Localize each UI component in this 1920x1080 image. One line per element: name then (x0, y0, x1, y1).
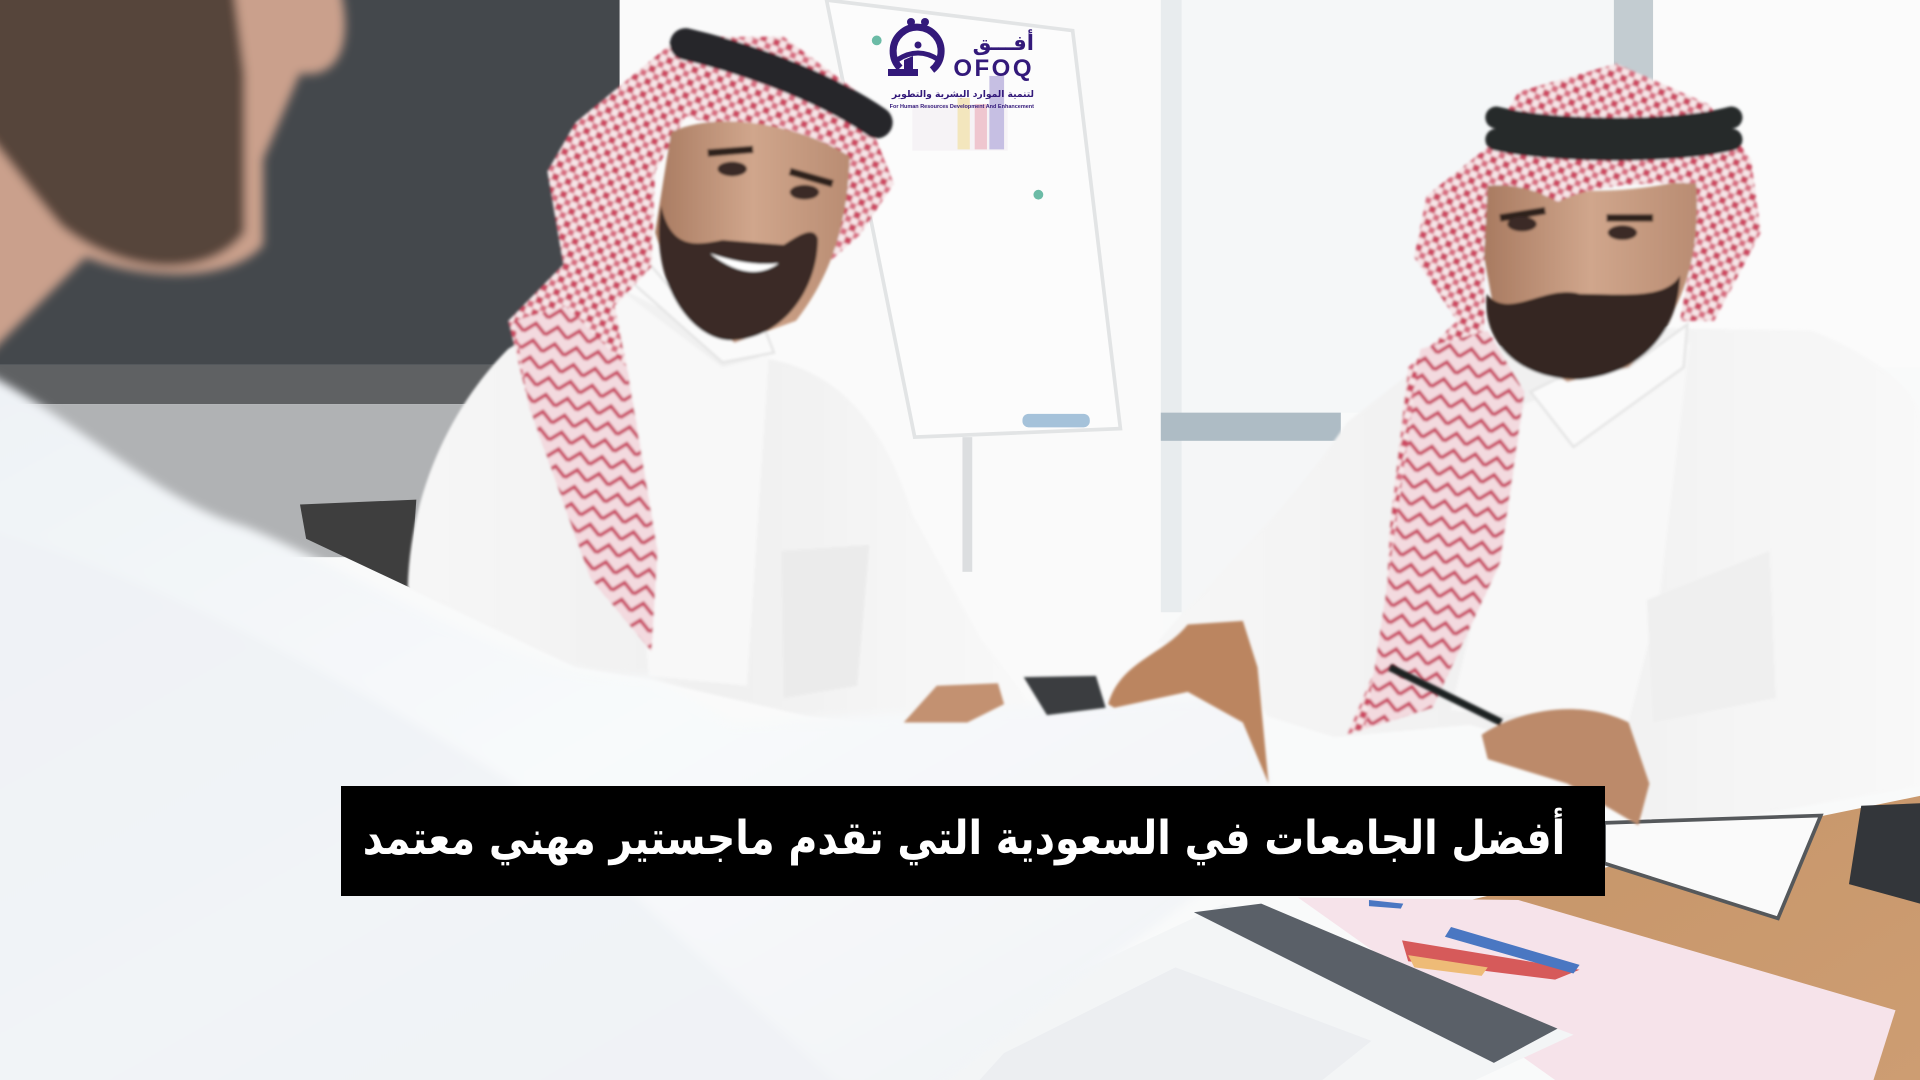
man on the right (1157, 64, 1920, 833)
logo english tagline: For Human Resources Development And Enhancement (890, 104, 1034, 110)
logo: OFOQ (888, 18, 1034, 110)
middle man headscarf (508, 37, 894, 651)
foreground person white sleeve (0, 367, 1269, 1080)
right man head band (1496, 118, 1731, 150)
right man hand and pen (1390, 667, 1649, 825)
right man face (1484, 178, 1697, 382)
right man beard (1486, 276, 1680, 380)
right man headscarf (1347, 64, 1761, 735)
right man robe (1157, 328, 1920, 833)
logo icon (888, 18, 941, 76)
whiteboard (827, 0, 1120, 572)
middle man beard (659, 206, 818, 340)
foreground person head (0, 0, 345, 367)
title bar (341, 786, 1605, 896)
middle man face (655, 121, 850, 343)
right man neck and collar (1531, 324, 1687, 447)
middle man robe (408, 284, 1041, 729)
table with papers (912, 796, 1920, 1080)
logo arabic name: أفـــق (973, 28, 1034, 55)
title: أفضل الجامعات في السعودية التي تقدم ماجستير مهني معتمد (363, 812, 1565, 866)
handshake (904, 621, 1269, 784)
middle man head band (686, 44, 877, 122)
logo arabic tagline: لتنمية الموارد البشرية والتطوير (891, 89, 1034, 100)
man in the middle (408, 37, 1041, 729)
wall monitor (0, 0, 620, 588)
logo latin name: OFOQ (953, 55, 1034, 82)
right man forehead scarf (1484, 149, 1702, 202)
middle man neck and collar (624, 263, 774, 362)
